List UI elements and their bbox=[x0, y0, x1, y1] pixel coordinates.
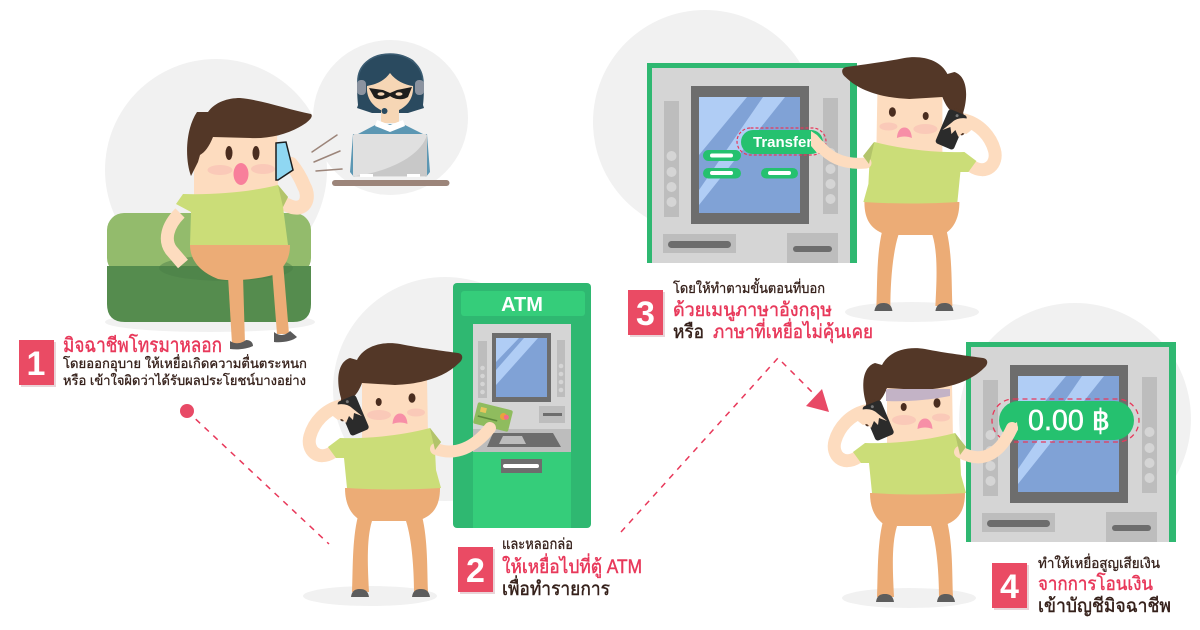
step 3 text: โดยให้ทำตามขั้นตอนที่บอก bbox=[673, 278, 825, 296]
step 4 text bbox=[1038, 554, 1171, 617]
scene 1: masked scammer with headset and laptop bbox=[332, 54, 450, 186]
scene 1: sound lines bbox=[312, 135, 342, 171]
scene 3: ATM close-up with menu: Transfer bbox=[753, 134, 812, 151]
background circle: scammer bbox=[313, 40, 468, 195]
step 1 text: มิจฉาชีพโทรมาหลอก bbox=[63, 334, 222, 357]
scene 3: ATM close-up with menu bbox=[647, 63, 857, 263]
step 4 text: เข้าบัญชีมิจฉาชีพ bbox=[1038, 595, 1171, 617]
dashed connector with arrow: step 2 to 4 bbox=[621, 358, 829, 532]
scene 2: ATM machine: ATM bbox=[501, 294, 543, 316]
step 2 text: เพื่อทำรายการ bbox=[502, 575, 610, 600]
step 1 text: หรือ เข้าใจผิดว่าได้รับผลประโยชน์บางอย่าง bbox=[63, 372, 306, 388]
step 3 text bbox=[673, 278, 873, 344]
step 1 text bbox=[63, 334, 307, 388]
step 4 badge bbox=[992, 563, 1029, 610]
scene 4: man seeing empty balance bbox=[834, 348, 1018, 608]
scene 1: man on phone bbox=[167, 98, 312, 349]
step 3 text: หรือ bbox=[673, 322, 704, 343]
step 1 badge bbox=[19, 340, 56, 387]
scene 2: man on phone with card bbox=[303, 343, 513, 606]
background circle: scene 3 bbox=[593, 10, 817, 234]
start dot bbox=[180, 404, 194, 418]
step 4 text: จากการโอนเงิน bbox=[1038, 572, 1153, 595]
scene 3: man pointing at Transfer bbox=[811, 57, 995, 322]
background circle: scene 4 bbox=[959, 303, 1191, 535]
background circle: scene 1 bbox=[105, 59, 327, 281]
scene 4: ATM close-up with zero balance bbox=[966, 342, 1176, 542]
step 2 text bbox=[502, 536, 642, 600]
step 1 text: โดยออกอุบาย ให้เหยื่อเกิดความตื่นตระหนก bbox=[63, 354, 307, 372]
scene 4: ATM close-up with zero balance: 0.00 ฿ bbox=[1028, 405, 1110, 437]
scene 1: sofa bbox=[105, 213, 315, 332]
background circle: scene 2 bbox=[333, 277, 557, 501]
step 1 badge: 1 bbox=[27, 345, 45, 383]
step 2 text: และหลอกล่อ bbox=[502, 536, 573, 553]
step 2 badge: 2 bbox=[466, 552, 485, 590]
step 4 text: ทำให้เหยื่อสูญเสียเงิน bbox=[1038, 554, 1160, 572]
scene 2: ATM machine bbox=[453, 283, 591, 528]
step 2 badge bbox=[458, 547, 495, 594]
step 3 badge: 3 bbox=[636, 295, 655, 333]
step 3 text: ภาษาที่เหยื่อไม่คุ้นเคย bbox=[713, 318, 873, 344]
step 3 badge bbox=[628, 290, 665, 337]
step 2 text: ให้เหยื่อไปที่ตู้ ATM bbox=[502, 553, 642, 578]
step 3 text: ด้วยเมนูภาษาอังกฤษ bbox=[673, 300, 832, 321]
dashed connector: step 1 to 2 bbox=[187, 411, 329, 544]
step 4 badge: 4 bbox=[1000, 568, 1019, 606]
